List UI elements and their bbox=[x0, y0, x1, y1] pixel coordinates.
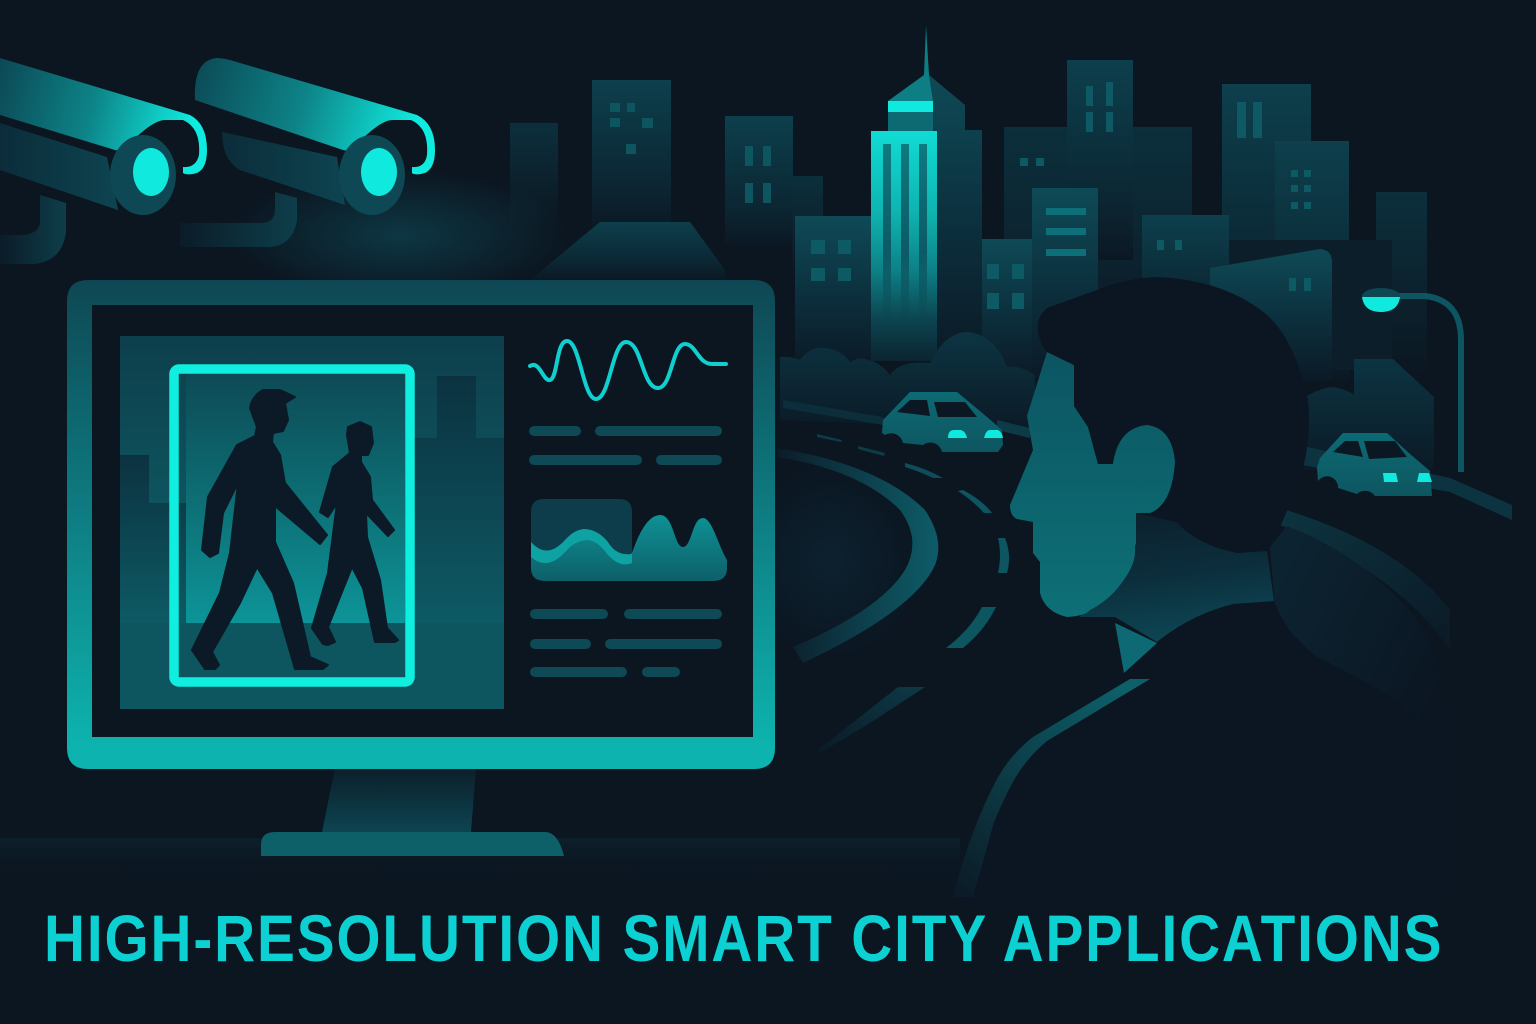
upper housing bbox=[195, 58, 435, 174]
video feed panel bbox=[120, 336, 504, 709]
hair bbox=[1038, 277, 1309, 553]
monitor base bbox=[261, 832, 564, 856]
upper housing bbox=[0, 58, 207, 174]
title: HIGH-RESOLUTION SMART CITY APPLICATIONS bbox=[44, 902, 1441, 976]
city skyline left bbox=[230, 80, 823, 300]
monitor stand bbox=[322, 768, 476, 832]
street lamp bbox=[1362, 288, 1461, 472]
coat bbox=[950, 601, 1445, 905]
mount bbox=[0, 195, 66, 264]
shirt collar bbox=[1115, 623, 1157, 673]
lens bbox=[133, 148, 169, 196]
trees bbox=[780, 332, 1035, 430]
distant trees and house right bbox=[1300, 359, 1434, 470]
lens ring bbox=[110, 135, 176, 215]
mount bbox=[180, 192, 297, 247]
security camera left bbox=[0, 58, 207, 264]
car right bbox=[1317, 433, 1432, 496]
ear bbox=[1098, 425, 1175, 545]
area chart bbox=[531, 499, 727, 581]
monitor frame bbox=[67, 280, 775, 769]
detection box bbox=[120, 369, 504, 709]
face bbox=[1010, 352, 1136, 617]
back shoulder bbox=[1270, 526, 1450, 900]
pedestrian small bbox=[312, 422, 398, 645]
coat stripe bbox=[953, 679, 1150, 897]
dashboard panel bbox=[529, 341, 727, 677]
desk strip bbox=[0, 838, 960, 882]
lens ring bbox=[339, 135, 405, 215]
waveform bbox=[530, 341, 726, 399]
city skyline right bbox=[795, 60, 1427, 381]
security camera right bbox=[180, 58, 435, 247]
neck bbox=[1080, 513, 1274, 642]
central glowing tower bbox=[871, 25, 982, 361]
lens bbox=[361, 148, 397, 196]
person bbox=[950, 277, 1450, 905]
pedestrian large bbox=[192, 390, 328, 669]
car left bbox=[882, 392, 1003, 452]
road bbox=[740, 400, 1512, 753]
lower body bbox=[0, 123, 118, 210]
lower body bbox=[222, 132, 345, 205]
text rows bbox=[529, 426, 722, 677]
monitor bbox=[67, 280, 775, 856]
